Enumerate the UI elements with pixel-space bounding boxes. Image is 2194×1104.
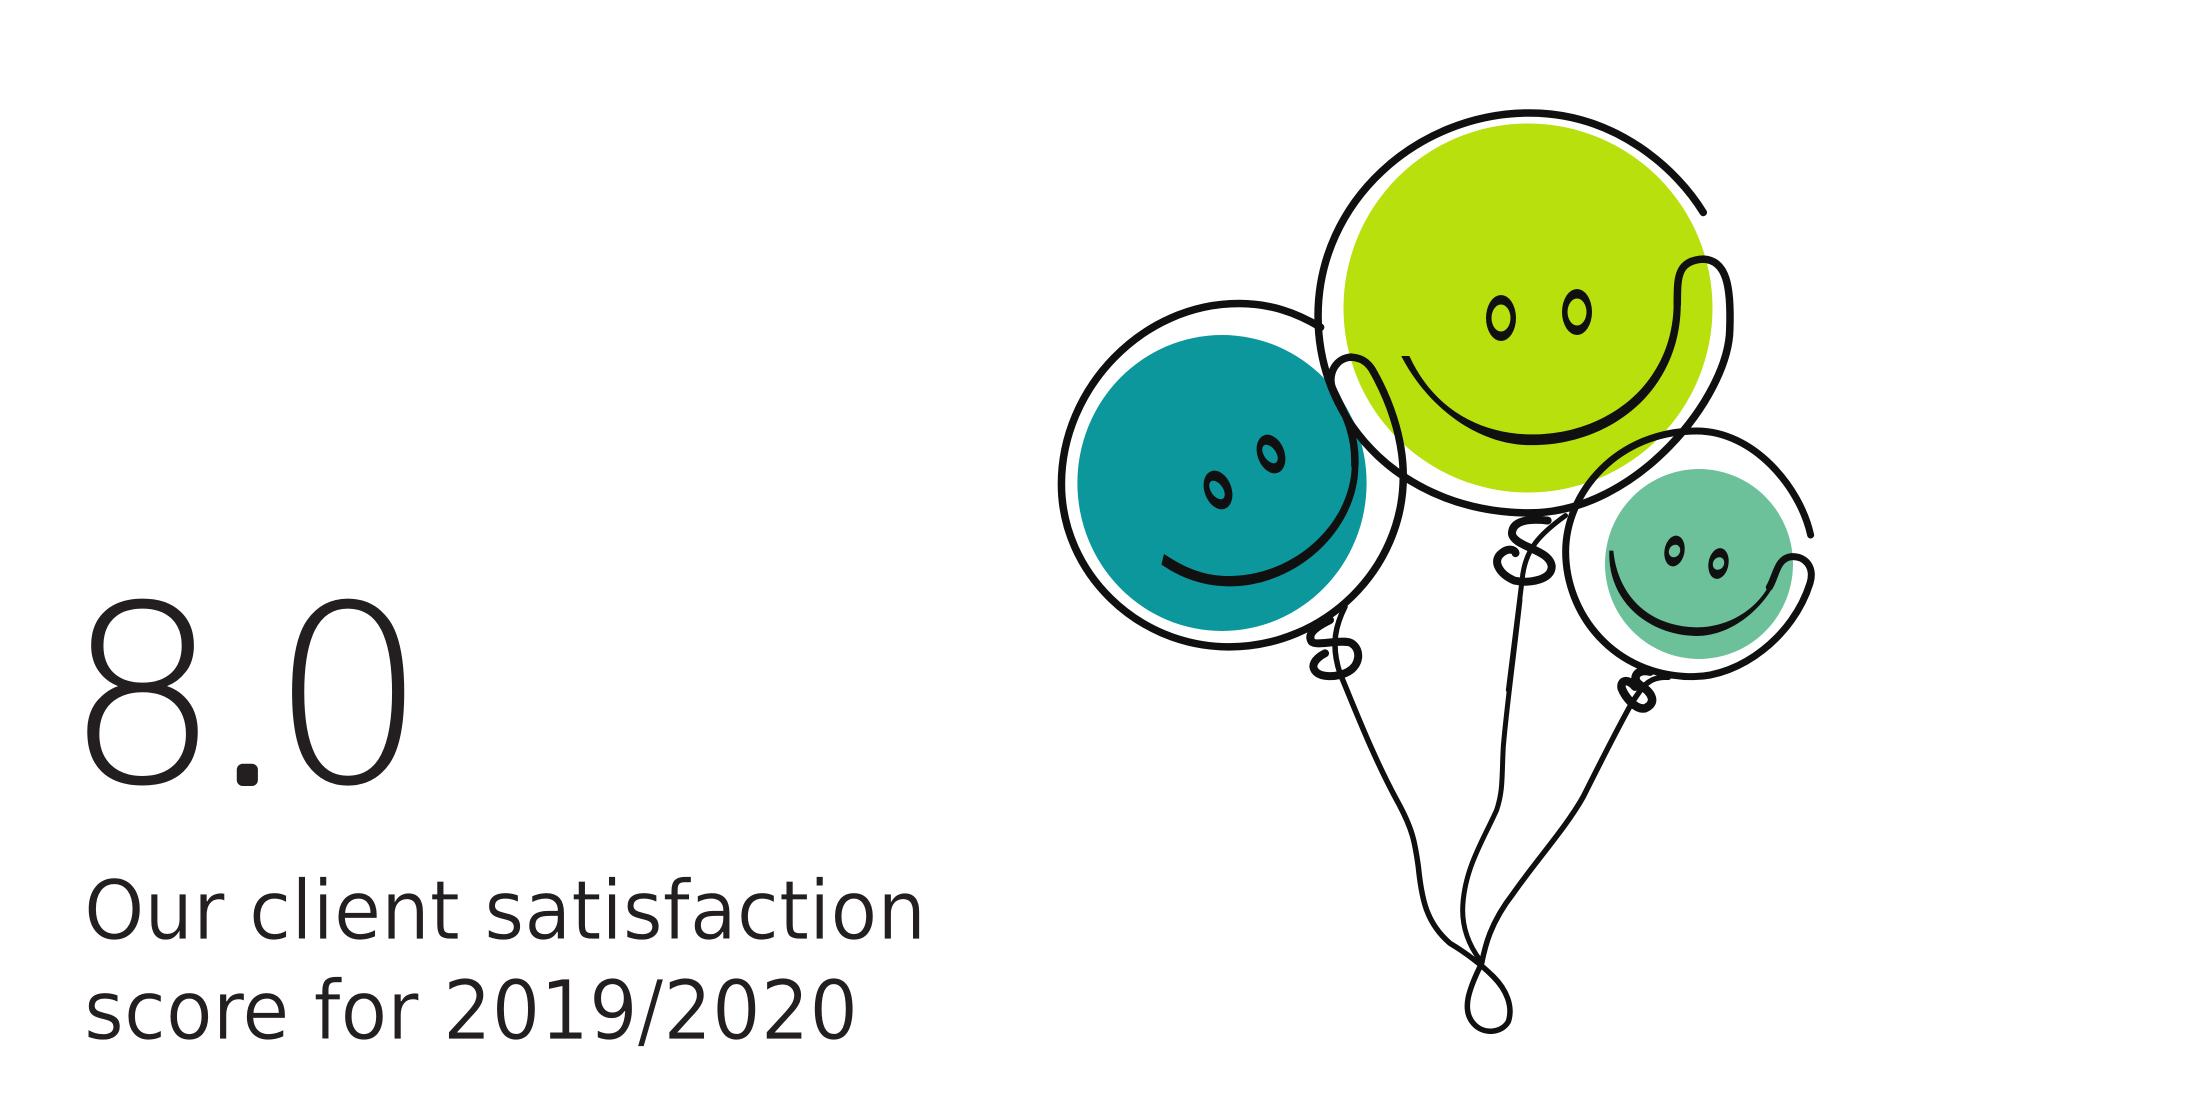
eyes: lime balloon right (1562, 289, 1592, 335)
teal balloon smile (1161, 465, 1358, 586)
balloon fill: teal (1077, 335, 1367, 631)
strings and teal knot (1310, 600, 1632, 1031)
mint balloon smile (1609, 551, 1772, 636)
lime balloon outline (1318, 113, 1730, 513)
balloon fill: mint (1605, 469, 1793, 659)
mint balloon outline and loop (1566, 431, 1811, 677)
subtitle text (84, 864, 926, 1059)
balloon outlines, smiles and knots (1061, 113, 1730, 690)
balloon illustration (1061, 113, 1811, 1031)
lime balloon smile loop (1677, 259, 1730, 329)
score number: 8 (64, 554, 221, 841)
lime balloon string (1463, 600, 1520, 960)
teal and mint strings with loop (1335, 607, 1632, 1031)
lime balloon string top (1508, 516, 1566, 690)
lime balloon smile (1401, 304, 1681, 445)
eyes: teal balloon right (1251, 431, 1291, 477)
balloon fill: lime (1344, 124, 1712, 492)
teal balloon knot (1310, 620, 1358, 676)
mint balloon lines (1566, 431, 1811, 708)
mint balloon neck and string top (1632, 677, 1668, 703)
subtitle text: score for 2019/2020 (84, 964, 858, 1059)
score number: . (234, 694, 261, 801)
teal balloon outline and loop (1061, 304, 1403, 647)
score number (64, 554, 427, 841)
mint balloon knot (1621, 671, 1652, 708)
eyes: teal balloon left (1198, 467, 1238, 513)
eyes: mint balloon left (1662, 534, 1687, 568)
eyes: lime balloon left (1486, 295, 1516, 341)
subtitle text: Our client satisfaction (84, 864, 926, 959)
eyes: mint balloon right (1706, 546, 1731, 581)
score number: 0 (270, 554, 427, 841)
lime balloon knot (1497, 520, 1552, 582)
